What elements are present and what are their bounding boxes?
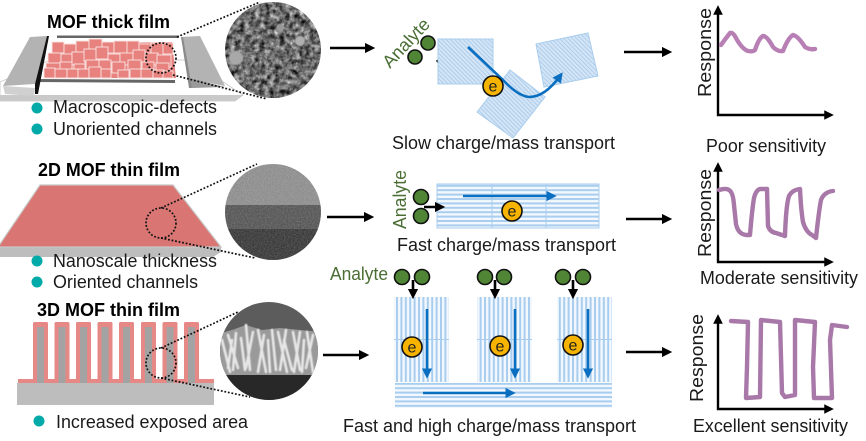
heading: 3D MOF thin film: 3D MOF thin film [37, 300, 180, 320]
panel: fast transport diagram [390, 170, 616, 255]
heading: 2D MOF thin film: 2D MOF thin film [38, 160, 180, 180]
axes [718, 9, 830, 115]
label: Analyte rotated: Analyte [378, 14, 434, 72]
arrow: row 1 film to transport [330, 47, 371, 49]
micrograph: film cross-section [224, 162, 322, 262]
response curve [731, 320, 847, 398]
axes [718, 166, 830, 262]
callout: zoom circle on film [146, 2, 267, 99]
callout: zoom circle on pillars [146, 312, 250, 397]
arrows: analyte entering [413, 280, 573, 295]
label: Analyte vertical: Analyte [390, 170, 410, 229]
arrow: tortuous electron path [468, 47, 560, 97]
panel: 3D MOF thin film [17, 300, 322, 432]
callout: zoom circle on flat film [146, 164, 257, 258]
heading: MOF thick film: MOF thick film [47, 12, 170, 32]
y label: Response [695, 8, 715, 97]
response curve [721, 33, 815, 51]
bullet: Oriented channels: Oriented channels [53, 272, 198, 292]
y label: Response [695, 169, 715, 257]
icon: electron: e [489, 78, 498, 96]
caption: Excellent sensitivity [693, 416, 848, 436]
bullet: Unoriented channels: Unoriented channels [53, 119, 217, 139]
arrow: electron path [463, 195, 552, 197]
icon: electron [502, 201, 522, 221]
panel: MOF thick film [0, 0, 322, 139]
response curve [719, 189, 833, 238]
arrow: row 3 film to transport [323, 354, 365, 356]
icons: electrons: e [496, 338, 505, 356]
chart: moderate sensitivity [695, 166, 858, 288]
panel: 2D MOF thin film [0, 160, 322, 292]
icons: electrons [402, 335, 583, 357]
illustration: pillar array [17, 322, 214, 405]
axes [718, 318, 830, 409]
diagram: vertical channels and base [394, 297, 612, 408]
caption: Poor sensitivity [706, 136, 826, 156]
bullet: Increased exposed area: Increased exposed area [56, 412, 249, 432]
chart: poor sensitivity [695, 8, 830, 156]
arrow: analyte entering [424, 206, 441, 208]
panel: slow transport diagram [378, 14, 615, 153]
caption: Moderate sensitivity [700, 268, 858, 288]
bullet: Nanoscale thickness: Nanoscale thickness [53, 251, 217, 271]
micrograph: rough MOF particles [224, 0, 322, 100]
illustration: thick film device [0, 36, 243, 101]
bullet: Macroscopic-defects: Macroscopic-defects [53, 97, 217, 117]
icon: electron [483, 76, 503, 96]
caption: fast and high transport: Fast and high charge/mass transport [343, 416, 636, 436]
icons: electrons: e [408, 340, 417, 356]
panel: fast and high transport diagram [330, 264, 636, 436]
illustration: flat film [0, 185, 221, 257]
caption: slow transport: Slow charge/mass transport [392, 133, 615, 153]
arrow: analyte entering [437, 60, 447, 74]
arrow: row 2 film to transport [327, 216, 370, 218]
arrow: row 3 transport to response [626, 351, 668, 353]
chart: excellent sensitivity [687, 314, 848, 436]
icons: electrons: e [569, 338, 578, 354]
icon: electron: e [508, 204, 517, 220]
micrograph: nanorods [220, 302, 318, 400]
icon: analyte molecules [394, 270, 590, 284]
icon: analyte molecules [414, 190, 428, 224]
label: Analyte horizontal: Analyte [330, 264, 388, 284]
icon: analyte molecules [408, 36, 435, 64]
diagram: misaligned crystals [438, 33, 598, 138]
y label: Response [687, 314, 707, 402]
caption: fast transport: Fast charge/mass transport [397, 235, 616, 255]
arrow: row 2 transport to response [626, 218, 668, 220]
diagram: aligned film [437, 184, 599, 228]
arrow: row 1 transport to response [624, 51, 668, 53]
arrows: electron paths [423, 309, 588, 393]
